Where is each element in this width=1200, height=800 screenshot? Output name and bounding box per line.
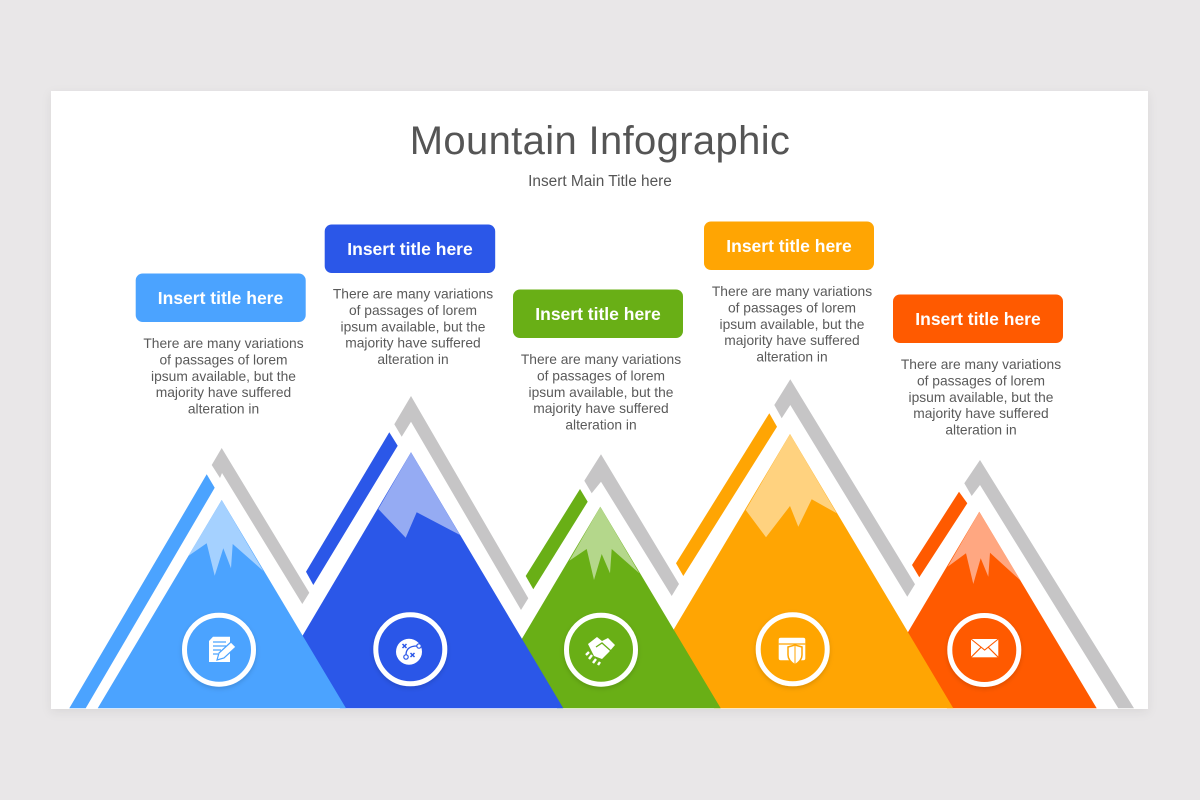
column 1 title box <box>136 274 306 322</box>
column 5 text <box>901 357 1061 438</box>
column 4 text: There are many variations <box>712 284 872 299</box>
column 5 text: There are many variations <box>901 357 1061 372</box>
column 2 title box <box>325 224 495 273</box>
column 3 text: alteration in <box>565 418 637 432</box>
column 2 text <box>333 286 493 367</box>
column 5 text: majority have suffered <box>913 406 1049 421</box>
icon ring 1 with document and pencil <box>184 615 254 684</box>
mountain 2: royal blue <box>300 396 563 708</box>
column 2 text: ipsum available, but the <box>341 320 486 334</box>
column 2 text: of passages of lorem <box>349 303 477 318</box>
icon ring 5 with envelope <box>950 616 1019 684</box>
column 2 text: majority have suffered <box>345 336 481 350</box>
column 5 text: ipsum available, but the <box>909 390 1054 405</box>
column 5 title box <box>893 294 1063 343</box>
column 5 text: of passages of lorem <box>917 374 1045 388</box>
column 1 text: of passages of lorem <box>159 352 288 368</box>
column 5 text: alteration in <box>945 422 1017 438</box>
column 1 text <box>143 336 304 416</box>
column 4 title box: Insert title here <box>726 236 852 256</box>
title: Mountain Infographic <box>410 119 790 163</box>
mountain 3: green <box>520 454 721 708</box>
icon ring 2 with strategy play <box>376 615 445 684</box>
column 5 title box: Insert title here <box>915 309 1041 329</box>
column 2 text: There are many variations <box>333 286 493 302</box>
column 1 title box: Insert title here <box>158 288 283 308</box>
mountain 1: light blue <box>69 448 346 708</box>
column 2 title box: Insert title here <box>347 239 473 259</box>
column 1 text: There are many variations <box>143 336 304 351</box>
column 1 text: ipsum available, but the <box>151 369 296 384</box>
column 4 text: ipsum available, but the <box>720 317 865 332</box>
icon ring 3 with handshake <box>566 615 636 684</box>
column 3 text: ipsum available, but the <box>529 385 674 400</box>
column 1 text: alteration in <box>188 402 259 416</box>
column 2 text: alteration in <box>377 352 449 367</box>
column 4 text <box>712 284 872 364</box>
column 4 text: of passages of lorem <box>728 300 856 316</box>
column 3 text <box>521 352 681 432</box>
column 3 text: There are many variations <box>521 352 681 367</box>
column 4 title box <box>704 222 874 270</box>
column 4 text: majority have suffered <box>724 333 860 348</box>
mountain 4: orange <box>672 379 953 708</box>
column 4 text: alteration in <box>756 350 828 364</box>
column 3 text: of passages of lorem <box>537 368 665 384</box>
column 3 title box <box>513 290 683 338</box>
subtitle: Insert Main Title here <box>528 173 672 190</box>
slide card <box>51 91 1148 709</box>
icon ring 4 with browser shield <box>758 615 827 684</box>
column 3 text: majority have suffered <box>533 401 669 416</box>
mountain 5: red <box>906 460 1134 708</box>
column 1 text: majority have suffered <box>156 385 291 400</box>
column 3 title box: Insert title here <box>535 304 661 324</box>
